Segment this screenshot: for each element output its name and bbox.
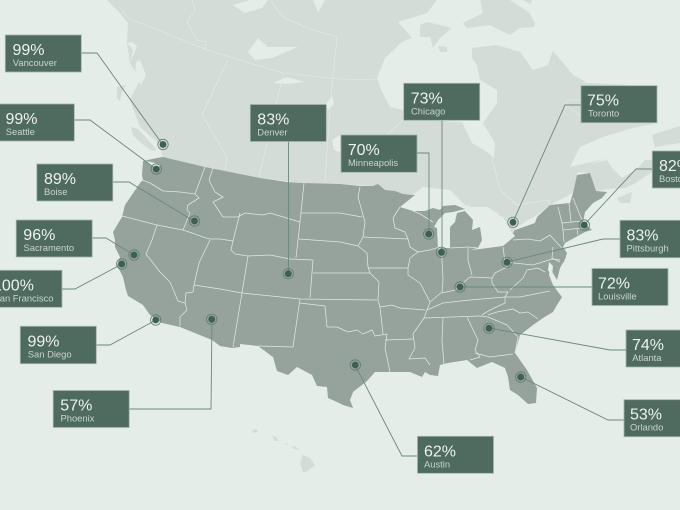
callout: Toronto 75%: Toronto	[588, 108, 619, 119]
map: Canada	[107, 0, 680, 252]
marker: Louisville	[455, 282, 465, 292]
leader: Pittsburgh	[507, 239, 620, 262]
callout: Vancouver 99%: Vancouver	[13, 57, 57, 68]
callout: Austin 62%: Austin	[424, 458, 450, 469]
marker: San Diego	[150, 315, 161, 325]
marker: Chicago	[436, 247, 447, 258]
marker: Boston	[579, 220, 590, 230]
map: Haida Gwaii	[117, 85, 126, 101]
marker: Phoenix	[206, 314, 217, 324]
map: small arctic island	[523, 0, 532, 4]
callout: Phoenix 57%: 57%	[60, 398, 92, 414]
leader: San Francisco	[62, 264, 122, 289]
callout: Sacramento 96%: 96%	[23, 227, 55, 244]
marker: Atlanta	[484, 323, 494, 333]
callout: Phoenix 57%: Phoenix	[60, 412, 95, 424]
callout: Boise 89%: Boise	[44, 186, 67, 197]
map: Puget Sound	[146, 161, 160, 172]
marker: Denver	[283, 268, 293, 279]
marker: Seattle	[151, 164, 162, 174]
map: Great Bear Lake	[248, 38, 298, 60]
callout: Louisville 72%	[592, 268, 668, 306]
callout: Minneapolis 70%	[341, 135, 417, 172]
map: United States	[113, 157, 607, 408]
callout: Pittsburgh 83%	[620, 220, 680, 258]
callout: Vancouver 99%	[5, 35, 81, 72]
callout: Sacramento 96%	[16, 220, 92, 257]
marker: Minneapolis	[424, 229, 434, 239]
callout: Atlanta 74%: 74%	[632, 337, 664, 354]
callout: Phoenix 57%	[53, 390, 129, 428]
map: state borders west	[122, 167, 390, 372]
callout: San Diego 99%	[20, 326, 96, 364]
leader: Louisville	[460, 286, 592, 288]
map: Coats Island	[438, 46, 447, 52]
callout: Seattle 99%	[0, 104, 74, 141]
callout: Toronto 75%: 75%	[587, 93, 619, 110]
map: Louisiana delta	[425, 371, 438, 376]
callout: Boise 89%	[37, 164, 113, 201]
leader: Vancouver	[81, 53, 163, 145]
callout: Orlando 53%	[624, 400, 680, 437]
leader: Minneapolis	[417, 153, 429, 234]
callout: Denver 83%: Denver	[257, 126, 288, 138]
leader: Seattle	[74, 120, 156, 169]
marker: Pittsburgh	[502, 257, 512, 267]
callout: Louisville 72%: 72%	[598, 276, 630, 292]
map: state borders north-east	[503, 198, 583, 262]
callout: Denver 83%	[250, 104, 326, 142]
map: Chesapeake Bay	[548, 262, 553, 277]
map: Pacific fjords south	[135, 60, 146, 85]
map: Lake Michigan	[436, 205, 470, 252]
leader: Boston	[584, 169, 652, 225]
map: Baffin Island	[463, 0, 535, 35]
leader: Orlando	[521, 377, 624, 420]
marker: Boise	[189, 216, 200, 226]
map: Newfoundland	[652, 126, 680, 147]
map: Lake Superior	[398, 187, 470, 214]
marker: Toronto	[508, 217, 518, 228]
map: Southampton Island	[420, 22, 452, 48]
leader: Austin	[355, 365, 417, 456]
callout: Seattle 99%: 99%	[6, 111, 38, 128]
callout: Vancouver 99%: 99%	[12, 42, 45, 59]
callout: Minneapolis 70%: 70%	[348, 142, 380, 159]
callout: Chicago 73%: Chicago	[411, 105, 445, 116]
callout: Austin 62%: 62%	[424, 443, 456, 460]
callout: Sacramento 96%: Sacramento	[24, 242, 74, 253]
map: Pacific fjords	[127, 42, 137, 63]
callout: Denver 83%: 83%	[257, 112, 289, 128]
map: New Brunswick	[578, 160, 652, 191]
callout: Pittsburgh 83%: Pittsburgh	[626, 242, 669, 254]
callout: Minneapolis 70%: Minneapolis	[348, 157, 398, 168]
map: Lake Athabasca	[326, 96, 334, 110]
map: Lake Huron	[460, 207, 500, 250]
marker: Sacramento	[129, 250, 139, 260]
map: Great Slave Lake	[273, 77, 305, 84]
callout: Boston 82%	[652, 151, 680, 188]
callout: Atlanta 74%: Atlanta	[632, 352, 662, 363]
marker: Orlando	[516, 372, 526, 382]
map: northern bays	[233, 0, 268, 13]
callout: Austin 62%	[418, 436, 494, 473]
leader: San Diego	[96, 320, 156, 345]
leader: Phoenix	[129, 319, 212, 409]
callout: Chicago 73%: 73%	[411, 90, 443, 107]
callout: Pittsburgh 83%: 83%	[626, 228, 659, 244]
callout: Louisville 72%: Louisville	[598, 290, 637, 302]
callout: San Francisco 100%	[0, 270, 62, 307]
map: Lake Erie	[474, 235, 518, 250]
map: state borders south-east	[467, 259, 560, 360]
map: Nova Scotia	[617, 192, 632, 203]
callout: Toronto 75%	[581, 86, 657, 123]
map: Hawaii	[252, 429, 315, 472]
marker: Austin	[350, 360, 360, 370]
map: Lake Winnipeg	[332, 135, 340, 152]
leader: Chicago	[441, 120, 443, 252]
leader: Boise	[113, 182, 194, 221]
marker: Vancouver	[158, 139, 168, 150]
leader: Toronto	[513, 105, 581, 222]
map: Vancouver Island	[131, 127, 157, 151]
callout: Boise 89%: 89%	[44, 171, 76, 188]
leader: Denver	[288, 141, 290, 274]
leader: Atlanta	[489, 328, 626, 350]
leader: Sacramento	[92, 238, 134, 255]
callout: Chicago 73%	[404, 83, 480, 120]
map: north inlet	[313, 0, 325, 12]
map: state borders central	[358, 187, 550, 365]
map: Canada province borders	[120, 0, 587, 205]
callout: Orlando 53%: Orlando	[630, 422, 663, 433]
callout: San Diego 99%: San Diego	[28, 348, 72, 360]
map: Lake Ontario	[515, 215, 537, 234]
map: Hudson Strait island	[513, 22, 535, 28]
callout: San Diego 99%: 99%	[28, 334, 60, 350]
callout: Atlanta 74%	[626, 330, 680, 367]
callout: Orlando 53%: 53%	[630, 407, 662, 424]
callout: Seattle 99%: Seattle	[6, 126, 35, 137]
marker: San Francisco	[116, 259, 127, 269]
